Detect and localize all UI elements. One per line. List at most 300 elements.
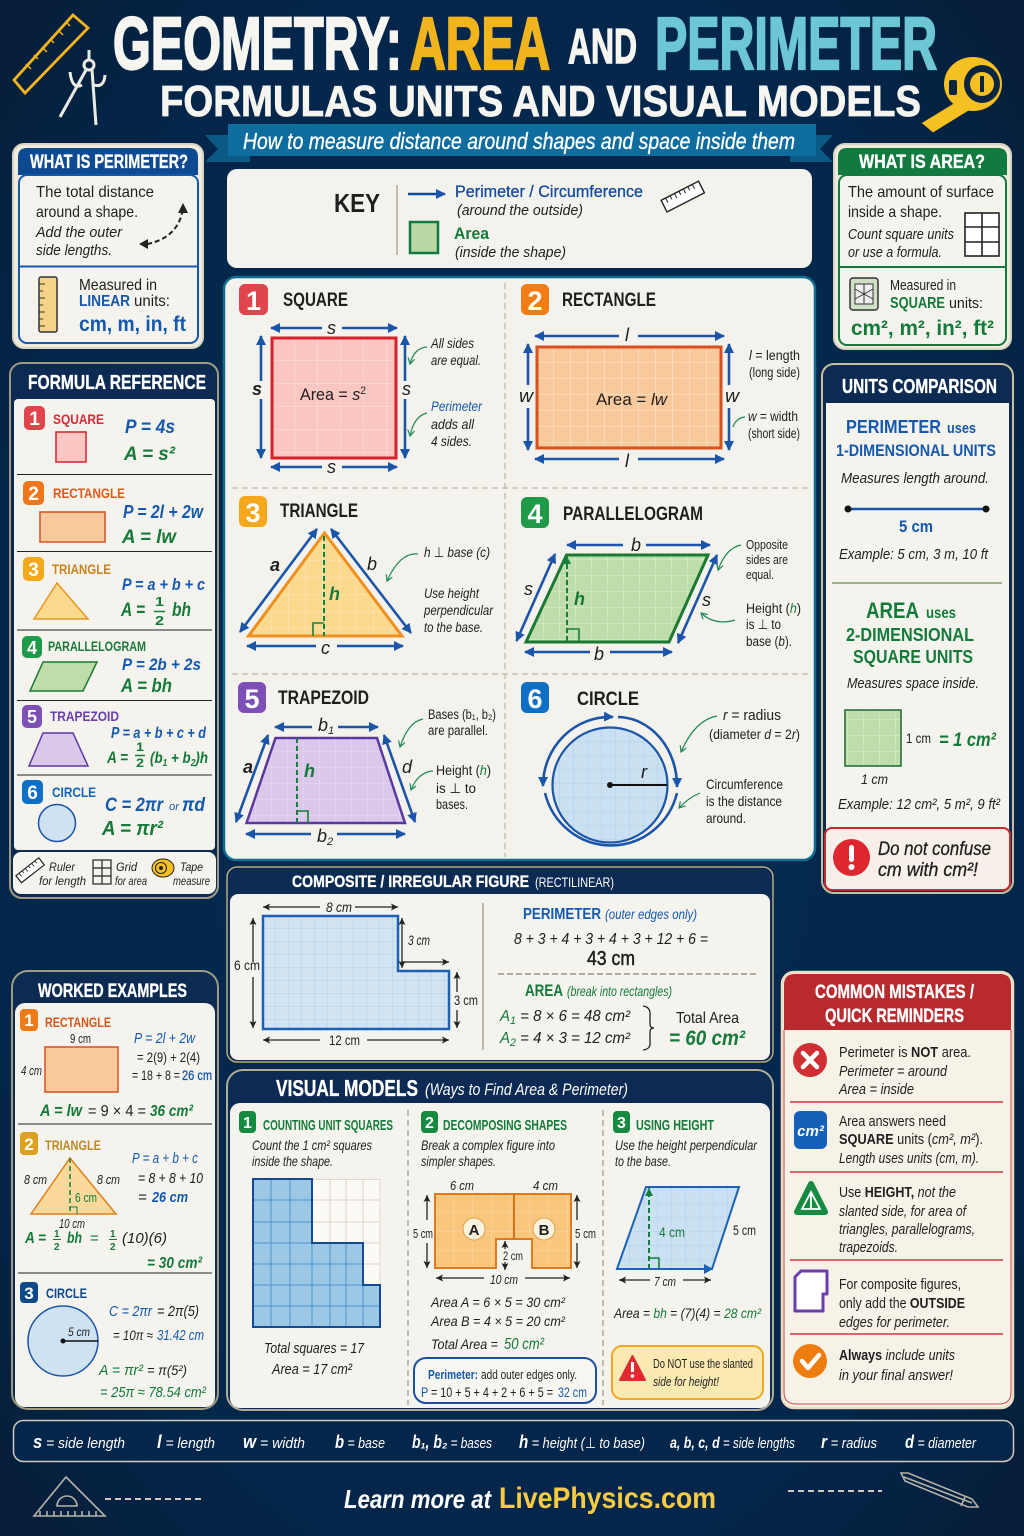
shape 4: parallelogram: is ⊥ to — [746, 617, 781, 632]
shape 5: trapezoid: 1 — [328, 725, 334, 737]
shape 5: trapezoid: 5 — [244, 684, 260, 714]
example: circle: 31.42 cm — [157, 1327, 204, 1344]
callout: do not confuse — [825, 828, 1010, 890]
mistake 3: slanted side, for area of — [839, 1204, 968, 1220]
shape 5: trapezoid: b — [317, 826, 327, 846]
example: triangle: 1 — [54, 1229, 60, 1240]
example: circle: = π(5²) — [147, 1362, 187, 1378]
example: circle: A = πr² — [98, 1362, 144, 1379]
example: triangle: = — [90, 1230, 99, 1247]
panel: formula reference — [10, 363, 218, 898]
row: circle — [22, 780, 205, 842]
model 2: decomposing shapes: Area B = 4 × 5 = 20 cm² — [430, 1313, 566, 1329]
shape 1: square: 1 — [246, 286, 261, 316]
model 3: using height: 5 cm — [733, 1222, 756, 1238]
area units: SQUARE UNITS — [853, 647, 973, 667]
area calculation: 1 — [510, 1015, 516, 1027]
shape 4: parallelogram: s — [702, 590, 711, 610]
row: trapezoid: (b — [150, 750, 165, 767]
shape 5: trapezoid: Height (h) — [436, 762, 491, 778]
shape 4: parallelogram: b — [631, 535, 641, 555]
shape 5: trapezoid: a — [243, 757, 253, 777]
mistake 3: trapezoids. — [839, 1240, 898, 1256]
tools legend: Tape — [180, 860, 203, 874]
shape 4: parallelogram: b — [594, 644, 604, 664]
title: AND — [568, 20, 637, 74]
row: square: P = 4s — [125, 417, 175, 438]
mistake 3 — [797, 1184, 975, 1256]
row: trapezoid: 2 — [190, 758, 196, 769]
callout: do not confuse: cm with cm²! — [878, 860, 979, 881]
panel: worked examples: WORKED EXAMPLES — [38, 981, 187, 1002]
shape 1: square — [239, 284, 483, 477]
shape 3: triangle: perpendicular — [423, 602, 494, 618]
shape 4: parallelogram: 4 — [527, 499, 543, 529]
shape 6: circle: Circumference — [706, 776, 783, 792]
panel: key: (around the outside) — [457, 202, 583, 219]
model 2: decomposing shapes: 2 — [425, 1115, 434, 1132]
panel: formula reference: FORMULA REFERENCE — [28, 372, 206, 394]
model 1: counting unit squares — [239, 1111, 393, 1378]
panel: what is perimeter: units: — [134, 293, 170, 310]
panel: what is area: cm², m², in², ft² — [851, 317, 994, 340]
shape 3: triangle: 3 — [245, 498, 261, 528]
model 3: using height: Area = bh = (7)(4) = 28 cm² — [613, 1305, 762, 1321]
example: triangle: 26 cm — [151, 1189, 188, 1206]
example: circle: 5 cm — [68, 1325, 90, 1339]
perimeter calculation — [514, 906, 708, 970]
title: GEOMETRY: — [113, 2, 402, 85]
key: perimeter arrow — [408, 193, 445, 195]
example: triangle: 2 — [110, 1242, 116, 1253]
area calculation: (break into rectangles) — [567, 983, 672, 999]
panel: visual models — [227, 1070, 773, 1410]
icon: compass — [60, 50, 105, 125]
shape 4: parallelogram: sides are — [746, 552, 788, 567]
tools legend — [16, 858, 210, 888]
shape 6: circle: r — [641, 762, 648, 782]
model 1: counting unit squares: inside the shape. — [252, 1153, 333, 1169]
row: circle: 6 — [27, 783, 38, 804]
mistake 5 — [793, 1344, 955, 1384]
example: rectangle: 9 cm — [70, 1031, 91, 1046]
perimeter note: add outer edges only. — [481, 1367, 577, 1382]
row: trapezoid: TRAPEZOID — [50, 708, 119, 724]
icon: pencil — [901, 1473, 978, 1507]
row: triangle — [23, 557, 205, 628]
row: circle: C = 2πr — [105, 795, 164, 816]
panel: visual models: (Ways to Find Area & Perimeter) — [425, 1080, 628, 1099]
row: parallelogram: A = bh — [120, 676, 172, 697]
model 2: decomposing shapes: 2 cm — [503, 1249, 523, 1263]
shape 2: rectangle: Area = lw — [596, 390, 669, 409]
area units: = 1 cm² — [939, 730, 997, 751]
perimeter calculation: PERIMETER — [523, 906, 601, 923]
model 2: decomposing shapes: Break a complex figure into — [421, 1137, 555, 1153]
model 2: decomposing shapes: 10 cm — [490, 1272, 518, 1287]
shape 3: triangle: TRIANGLE — [280, 501, 358, 522]
example: triangle: 8 cm — [24, 1172, 47, 1187]
shape 5: trapezoid: TRAPEZOID — [278, 688, 369, 709]
example: rectangle: 1 — [24, 1011, 34, 1030]
row: rectangle: RECTANGLE — [53, 485, 125, 501]
example: triangle: = 30 cm² — [147, 1255, 203, 1272]
warning callout — [612, 1346, 763, 1399]
model 1: counting unit squares: Count the 1 cm² squares — [252, 1137, 372, 1153]
example: triangle: bh — [67, 1230, 82, 1247]
area units: uses — [926, 605, 956, 622]
perimeter note: 32 cm — [558, 1385, 587, 1400]
panel: key: (inside the shape) — [455, 244, 566, 261]
shape 1: square: SQUARE — [283, 290, 348, 311]
row: triangle: bh — [172, 600, 191, 621]
shape 1: square: 4 sides. — [431, 433, 472, 449]
callout: do not confuse: Do not confuse — [878, 839, 991, 860]
shape 3: triangle — [239, 496, 494, 658]
shape 4: parallelogram: Opposite — [746, 537, 788, 552]
mistake 3: Use HEIGHT, not the — [839, 1184, 956, 1201]
legend strip: w = width — [243, 1432, 305, 1452]
row: square — [24, 406, 176, 465]
model 2: decomposing shapes: A — [469, 1222, 480, 1239]
example: rectangle: = 2(9) + 2(4) — [137, 1049, 200, 1065]
model 3: using height: 4 cm — [659, 1224, 685, 1240]
legend strip: l = length — [157, 1432, 215, 1452]
row: rectangle: 2 — [28, 484, 39, 505]
panel: what is area: inside a shape. — [848, 204, 942, 221]
shape 2: rectangle: w — [725, 386, 740, 406]
panel: what is perimeter: Add the outer — [35, 224, 123, 241]
mistake 2: Area answers need — [839, 1113, 946, 1130]
title: AREA — [410, 2, 550, 85]
example: circle — [20, 1282, 207, 1401]
area calculation: Total Area — [676, 1010, 739, 1027]
shape 2: rectangle: w — [519, 386, 534, 406]
area units: 1 cm — [861, 772, 888, 787]
model 3: using height: USING HEIGHT — [636, 1117, 714, 1134]
legend strip: b = base — [335, 1432, 385, 1452]
row: parallelogram: 4 — [27, 638, 37, 658]
shape 5: trapezoid: h — [304, 761, 315, 781]
panel: what is perimeter: cm, m, in, ft — [79, 313, 186, 336]
shape 3: triangle: to the base. — [424, 619, 483, 635]
shape 5: trapezoid: Bases (b₁, b₂) — [428, 707, 496, 722]
panel: key — [227, 169, 812, 268]
legend strip: d = diameter — [905, 1432, 977, 1452]
row: circle: A = πr² — [101, 818, 164, 840]
legend strip: h = height (⊥ to base) — [519, 1432, 645, 1452]
perimeter note: Perimeter: — [428, 1367, 478, 1382]
panel: common mistakes: COMMON MISTAKES / — [815, 982, 975, 1003]
icon: set square — [34, 1477, 105, 1516]
row: square: SQUARE — [53, 411, 104, 427]
mistake 1: Area = inside — [838, 1082, 914, 1098]
icon: arrowheads — [139, 203, 188, 249]
panel: what is area: WHAT IS AREA? — [859, 152, 985, 173]
model 2: decomposing shapes: 5 cm — [413, 1226, 433, 1241]
area units: 1 cm — [906, 731, 931, 746]
tools legend: Grid — [116, 860, 137, 874]
shape 1: square: adds all — [431, 416, 475, 432]
model 2: decomposing shapes: Total Area = — [431, 1336, 498, 1352]
example: triangle: 8 cm — [97, 1172, 120, 1187]
area units: Example: 12 cm², 5 m², 9 ft² — [838, 796, 1001, 813]
shape 6: circle: r = radius — [723, 708, 781, 724]
shape 1: square: are equal. — [431, 352, 481, 368]
example: triangle: 1 — [110, 1229, 116, 1240]
title — [113, 2, 937, 85]
ribbon banner: How to measure distance around shapes and space inside them — [243, 128, 795, 154]
example: triangle: TRIANGLE — [45, 1137, 101, 1153]
panel: what is perimeter: The total distance — [36, 184, 154, 201]
mistake 4 — [795, 1271, 965, 1331]
row: circle: or — [169, 801, 180, 813]
panel: key: Perimeter / Circumference — [455, 182, 643, 201]
panel: composite figure: (RECTILINEAR) — [535, 874, 614, 890]
row: trapezoid: 1 — [136, 740, 144, 754]
row: rectangle: A = lw — [121, 527, 177, 548]
row: trapezoid: 2 — [136, 756, 144, 770]
example: rectangle — [20, 1009, 212, 1120]
model 1: counting unit squares: COUNTING UNIT SQUARES — [263, 1117, 393, 1134]
shape 4: parallelogram: Height (h) — [746, 601, 801, 616]
warning callout: side for height! — [653, 1374, 719, 1389]
tools legend: for length — [39, 874, 86, 888]
model 2: decomposing shapes: simpler shapes. — [421, 1153, 496, 1169]
row: circle: πd — [182, 795, 205, 816]
example: triangle: A = — [24, 1230, 46, 1247]
mistake 2 — [794, 1111, 983, 1167]
row: trapezoid: 5 — [27, 707, 37, 727]
area calculation: A — [499, 1030, 516, 1049]
mistake 4: For composite figures, — [839, 1276, 961, 1293]
mistake 5: Always include units — [839, 1347, 955, 1364]
panel: what is area: Count square units — [848, 227, 954, 243]
panel: what is area: The amount of surface — [848, 184, 994, 201]
model 3: using height: to the base. — [615, 1153, 671, 1169]
shape 3: triangle: h — [329, 584, 340, 604]
model 2: decomposing shapes — [413, 1111, 596, 1403]
perimeter units: 1-DIMENSIONAL UNITS — [836, 441, 996, 460]
example: circle: = 25π ≈ 78.54 cm² — [100, 1384, 207, 1401]
footer call to action: Learn more at — [344, 1484, 492, 1514]
mistake 2: Length uses units (cm, m). — [839, 1151, 979, 1167]
perimeter units — [836, 417, 996, 563]
panel: what is area: units: — [949, 295, 983, 312]
model 3: using height: 7 cm — [654, 1274, 676, 1289]
row: square: A = s² — [123, 444, 176, 465]
panel: what is perimeter: Measured in — [79, 277, 157, 294]
example: rectangle: A = lw — [39, 1101, 84, 1120]
panel: key: KEY — [334, 188, 380, 218]
shape 2: rectangle: l — [625, 325, 630, 345]
row: circle: CIRCLE — [52, 784, 96, 800]
panel: what is area — [834, 144, 1011, 349]
panel: what is perimeter: WHAT IS PERIMETER? — [30, 152, 188, 173]
shape 6: circle: 6 — [527, 684, 543, 714]
area calculation: A — [499, 1008, 516, 1027]
model 2: decomposing shapes: Area A = 6 × 5 = 30 cm² — [430, 1294, 566, 1310]
model 3: using height — [612, 1111, 763, 1399]
row: parallelogram: PARALLELOGRAM — [48, 639, 146, 654]
area calculation: = 8 × 6 = 48 cm² — [516, 1008, 631, 1025]
shape 6: circle: (diameter d = 2r) — [709, 726, 800, 742]
dimensions: 12 cm — [329, 1032, 360, 1048]
row: rectangle: P = 2l + 2w — [123, 502, 204, 522]
example: triangle: 10 cm — [59, 1216, 85, 1231]
mistake 1: Perimeter = around — [839, 1064, 948, 1080]
panel: what is perimeter: side lengths. — [36, 242, 112, 259]
icon: tape measure — [921, 57, 1002, 133]
footer call to action — [344, 1482, 716, 1515]
shape 1: square: Area = s — [300, 385, 361, 404]
example: rectangle: = 9 × 4 = — [88, 1103, 146, 1120]
perimeter calculation: (outer edges only) — [605, 906, 697, 922]
tools legend: for area — [115, 874, 147, 888]
example: circle: CIRCLE — [46, 1285, 87, 1301]
panel: what is perimeter: around a shape. — [36, 204, 138, 221]
model 2: decomposing shapes: B — [539, 1222, 550, 1239]
mistake 1: Perimeter is NOT area. — [839, 1044, 971, 1061]
panel: visual models: VISUAL MODELS — [276, 1075, 418, 1101]
row: trapezoid: P = a + b + c + d — [111, 725, 207, 742]
key: area swatch — [410, 222, 438, 253]
area calculation: = 60 cm² — [669, 1027, 746, 1050]
legend strip: s = side length — [33, 1432, 125, 1452]
perimeter note: P = 10 + 5 + 4 + 2 + 6 + 5 = — [421, 1385, 553, 1400]
row: parallelogram: P = 2b + 2s — [122, 655, 201, 674]
row: triangle: 1 — [155, 594, 164, 609]
shape 2: rectangle: l — [625, 451, 630, 471]
area units: 2-DIMENSIONAL — [846, 625, 974, 645]
shape 3: triangle: a — [270, 555, 280, 575]
legend strip: r = radius — [821, 1432, 877, 1452]
shape 2: rectangle: l = length — [749, 348, 800, 363]
shape 5: trapezoid — [236, 682, 496, 848]
shape 6: circle: CIRCLE — [577, 689, 639, 710]
model 1: counting unit squares: Total squares = 17 — [264, 1340, 365, 1357]
mistake 2: SQUARE units (cm², m²). — [839, 1131, 983, 1148]
shape 4: parallelogram: equal. — [746, 567, 774, 582]
shape 1: square: All sides — [430, 335, 474, 351]
panel: composite figure — [227, 867, 773, 1062]
row: trapezoid: A = — [106, 748, 128, 767]
row: trapezoid — [22, 705, 208, 770]
example: rectangle: 26 cm — [182, 1067, 212, 1083]
model 3: using height: 3 — [617, 1115, 626, 1132]
perimeter units: uses — [947, 420, 976, 437]
subtitle: FORMULAS UNITS AND VISUAL MODELS — [160, 77, 921, 126]
model 3: using height: Use the height perpendicular — [615, 1137, 758, 1153]
panel: what is area: or use a formula. — [848, 245, 942, 261]
icon: ruler — [661, 181, 704, 212]
panel: composite figure: COMPOSITE / IRREGULAR FIGURE — [292, 873, 529, 891]
row: triangle: P = a + b + c — [122, 575, 205, 594]
shape 5: trapezoid: 2 — [326, 836, 333, 848]
shape 4: parallelogram: base (b). — [746, 634, 792, 649]
shape 2: rectangle: (long side) — [749, 365, 800, 380]
perimeter units: PERIMETER — [846, 417, 941, 437]
perimeter units: Measures length around. — [841, 470, 989, 487]
area units: Measures space inside. — [847, 675, 979, 692]
panel: what is perimeter: LINEAR — [79, 293, 130, 310]
mistake 4: edges for perimeter. — [839, 1315, 950, 1331]
mistake 4: only add the OUTSIDE — [839, 1295, 965, 1312]
legend strip: b₁, b₂ = bases — [412, 1432, 492, 1452]
shape 2: rectangle: RECTANGLE — [562, 290, 656, 311]
shape 5: trapezoid: b — [318, 715, 328, 735]
perimeter units: 5 cm — [899, 517, 933, 536]
shape 6: circle: around. — [706, 810, 746, 826]
example: triangle: 6 cm — [75, 1190, 97, 1205]
area calculation: 2 — [509, 1037, 516, 1049]
dimensions — [234, 899, 478, 1048]
area units: AREA — [866, 598, 919, 623]
shape 1: square: s — [327, 457, 336, 477]
panel: worked examples — [12, 971, 218, 1409]
row: rectangle — [23, 481, 204, 548]
icon: dashed arrow — [147, 209, 183, 244]
panel: common mistakes: QUICK REMINDERS — [825, 1006, 964, 1027]
row: trapezoid: + b — [167, 750, 191, 767]
model 2: decomposing shapes: 4 cm — [533, 1178, 558, 1193]
icon: ruler — [39, 277, 57, 332]
panel: shapes — [224, 277, 815, 860]
panel: what is perimeter — [13, 144, 203, 348]
dimensions: 6 cm — [234, 957, 260, 973]
warning callout: Do NOT use the slanted — [653, 1356, 753, 1371]
mistake 5: in your final answer! — [839, 1368, 953, 1384]
example: triangle: = — [138, 1189, 147, 1206]
model 2: decomposing shapes: 6 cm — [450, 1178, 474, 1193]
shape 4: parallelogram: PARALLELOGRAM — [563, 504, 703, 525]
example: circle: = 2π(5) — [157, 1303, 199, 1320]
area calculation — [499, 981, 746, 1050]
footer call to action: LivePhysics.com — [499, 1482, 716, 1515]
shape 1: square: s — [402, 379, 411, 399]
perimeter note — [414, 1358, 596, 1403]
icon: square units — [850, 278, 878, 310]
shape 1: square: Perimeter — [431, 398, 483, 414]
ribbon banner — [205, 124, 833, 162]
area calculation: = 4 × 3 = 12 cm² — [516, 1030, 631, 1047]
tools legend: measure — [173, 874, 210, 888]
example: triangle — [20, 1132, 204, 1272]
perimeter calculation: 43 cm — [587, 948, 635, 970]
model 2: decomposing shapes: 5 cm — [575, 1226, 596, 1241]
shape 6: circle: is the distance — [706, 793, 782, 809]
row: square: 1 — [29, 409, 40, 430]
shape 4: parallelogram — [516, 497, 801, 664]
shape 2: rectangle: (short side) — [748, 426, 800, 441]
example: circle: 3 — [24, 1284, 34, 1303]
shape 1: square: s — [327, 318, 336, 338]
perimeter units: Example: 5 cm, 3 m, 10 ft — [839, 546, 989, 563]
shape 3: triangle: h ⊥ base (c) — [424, 544, 490, 560]
shape 2: rectangle: 2 — [527, 286, 543, 316]
shape 1: square: s — [252, 379, 262, 399]
row: parallelogram — [22, 636, 201, 697]
legend strip: a, b, c, d = side lengths — [670, 1435, 795, 1452]
example: rectangle: 36 cm² — [150, 1103, 194, 1120]
panel: common mistakes — [782, 972, 1013, 1408]
shape 5: trapezoid: are parallel. — [428, 723, 488, 738]
row: triangle: 2 — [155, 613, 164, 628]
panel: key: Area — [454, 224, 489, 243]
legend strip — [14, 1420, 1014, 1462]
example: rectangle: 4 cm — [21, 1063, 42, 1078]
mistake 3: triangles, parallelograms, — [839, 1222, 975, 1238]
